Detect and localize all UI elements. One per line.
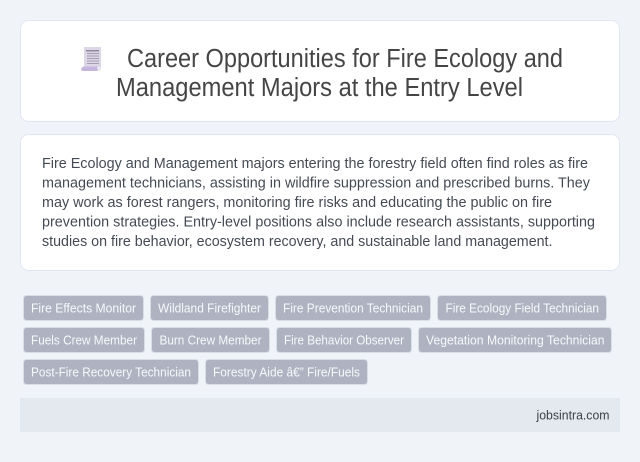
tag: Wildland Firefighter xyxy=(150,296,268,320)
tag: Fire Prevention Technician: Fire Prevention Technician xyxy=(283,300,423,316)
tag list: job titles xyxy=(24,296,612,384)
tag: Forestry Aide xyxy=(206,360,368,384)
description text: Fire Ecology and Management majors entering the forestry field often find roles as fire xyxy=(42,155,588,172)
description text: studies on fire behavior, ecosystem recovery, and sustainable land management. xyxy=(42,233,552,250)
tag: Post-Fire Recovery Technician xyxy=(24,360,198,384)
tag: Burn Crew Member: Burn Crew Member xyxy=(160,332,262,348)
tag: Vegetation Monitoring Technician: Vegetation Monitoring Technician xyxy=(426,332,604,348)
panel: description card xyxy=(20,134,620,270)
description text: prevention strategies. Entry-level positions also include research assistants, supporting xyxy=(42,214,595,230)
title: Career Opportunities for Fire Ecology and xyxy=(127,45,563,73)
footer source text: jobsintra.com xyxy=(536,408,610,422)
tag: Fire Prevention Technician xyxy=(276,296,430,320)
tag: Wildland Firefighter: Wildland Firefighter xyxy=(158,300,262,316)
tag: Fire Behavior Observer xyxy=(276,328,412,352)
tag: Forestry Aide: Forestry Aide â€” Fire/Fuels xyxy=(213,364,360,380)
tag: Fire Effects Monitor xyxy=(24,296,144,320)
tag: Fire Behavior Observer: Fire Behavior Observer xyxy=(284,332,405,348)
tag: Fire Ecology Field Technician xyxy=(438,296,606,320)
tag: Fire Effects Monitor: Fire Effects Monitor xyxy=(31,300,137,316)
title: Management Majors at the Entry Level xyxy=(116,74,523,102)
footer bar xyxy=(20,398,620,432)
icon: document scroll xyxy=(81,47,101,71)
title xyxy=(116,45,563,102)
panel: title card xyxy=(20,20,620,122)
tag: Fuels Crew Member: Fuels Crew Member xyxy=(31,332,138,348)
tag: Fire Ecology Field Technician: Fire Ecology Field Technician xyxy=(446,300,599,316)
tag: Burn Crew Member xyxy=(152,328,270,352)
description text xyxy=(42,155,595,250)
description text: may work as forest rangers, monitoring fire risks and educating the public on fire xyxy=(42,194,552,211)
description text: management technicians, assisting in wildfire suppression and prescribed burns. They xyxy=(42,174,590,192)
tag: Fuels Crew Member xyxy=(24,328,144,352)
tag: Post-Fire Recovery Technician: Post-Fire Recovery Technician xyxy=(31,364,191,380)
tag: Vegetation Monitoring Technician xyxy=(418,328,612,352)
